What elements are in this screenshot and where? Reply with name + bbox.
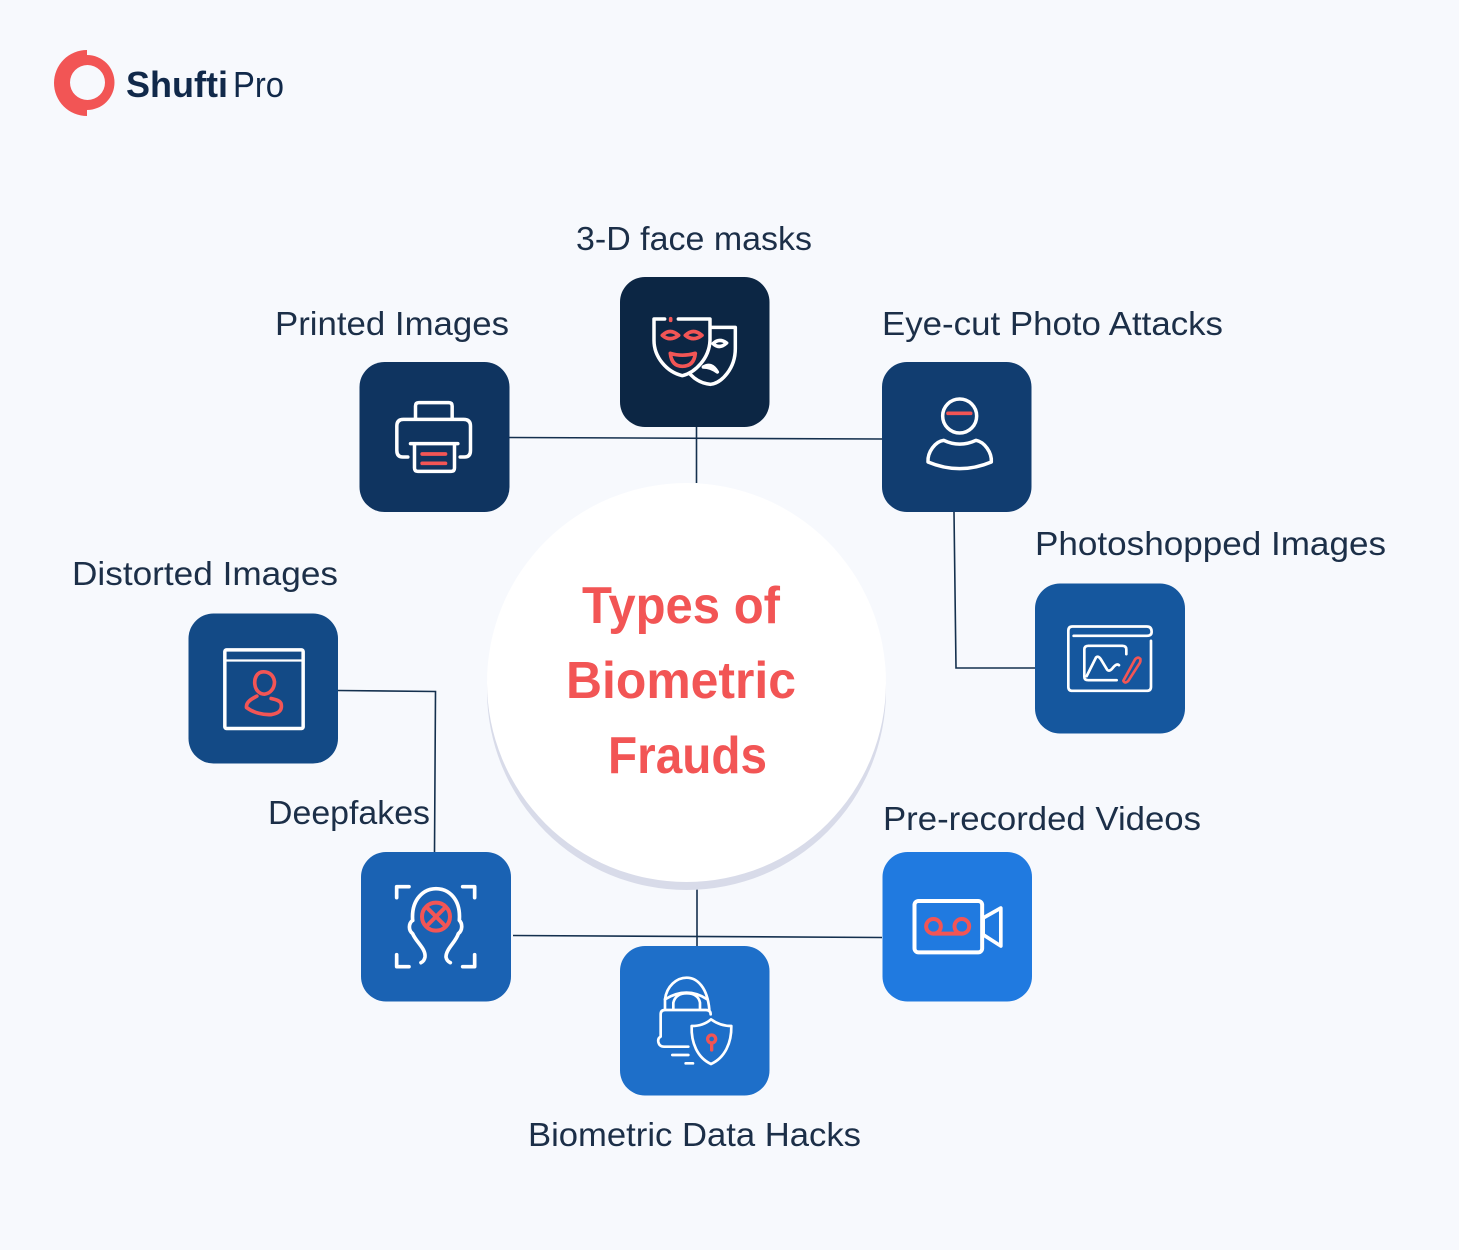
tile: eye-cut person icon (882, 362, 1032, 512)
tile: photo editing icon (1035, 584, 1185, 734)
tile: lock and shield icon (620, 946, 770, 1096)
tile: 3-D face masks icon (620, 277, 770, 427)
tile: video recording icon (882, 852, 1032, 1002)
central circle: Types of Biometric Frauds: Biometric (566, 652, 796, 710)
connector lines (338, 427, 1035, 946)
central circle: Types of Biometric Frauds: Types of (582, 577, 781, 635)
label: 3-D face masks: 3-D face masks (576, 220, 812, 257)
tile: printer icon (360, 362, 510, 512)
label: Deepfakes: Deepfakes (268, 794, 430, 831)
logo: Shufti Pro: Shufti (126, 64, 228, 105)
label: Pre-recorded Videos: Pre-recorded Videos (883, 800, 1201, 837)
label: Photoshopped Images: Photoshopped Images (1035, 525, 1386, 562)
label: Distorted Images: Distorted Images (72, 555, 338, 592)
logo: Shufti Pro: Pro (233, 64, 284, 105)
central circle: Types of Biometric Frauds: Frauds (608, 727, 767, 785)
label: Printed Images: Printed Images (275, 305, 509, 342)
logo: Shufti Pro (54, 50, 284, 116)
tile: deepfake face scan icon (361, 852, 511, 1002)
label: Eye-cut Photo Attacks: Eye-cut Photo Attacks (882, 305, 1223, 342)
tile: distorted image icon (188, 614, 338, 764)
label: Biometric Data Hacks: Biometric Data Hacks (528, 1116, 861, 1153)
central circle: Types of Biometric Frauds (487, 483, 886, 890)
